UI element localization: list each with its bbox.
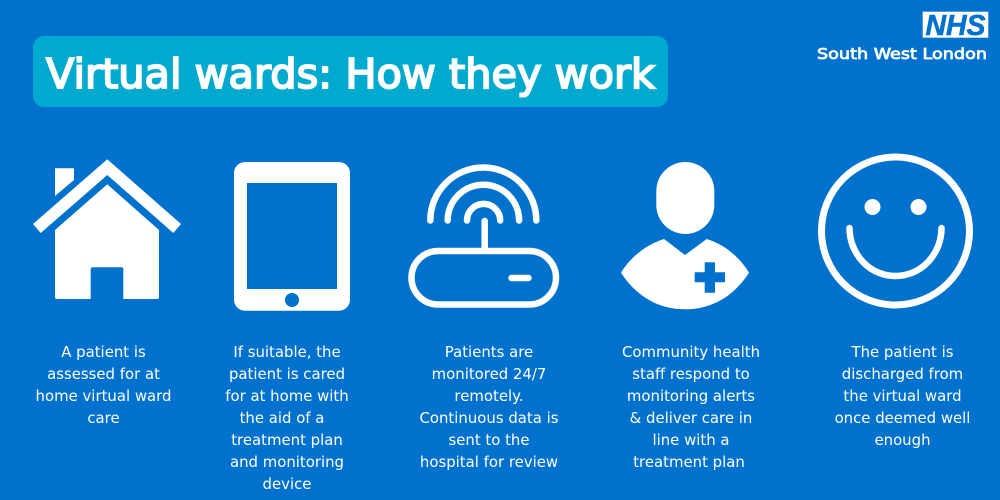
NHS South West London logo: South West London: [817, 45, 987, 63]
step 5 text: [835, 343, 970, 449]
step 2 text: and monitoring: [230, 453, 344, 471]
step 3 text: sent to the: [448, 431, 530, 449]
step 5 text: the virtual ward: [843, 387, 962, 405]
step 4 text: [622, 343, 760, 471]
step 3 text: [419, 343, 559, 471]
step 1 text: care: [87, 409, 120, 427]
step 5 text: enough: [874, 431, 931, 449]
step 5 text: once deemed well: [835, 409, 970, 427]
icon: house: [33, 159, 181, 299]
step 2 text: treatment plan: [231, 431, 343, 449]
step 1 text: A patient is: [61, 343, 146, 361]
step 3 text: Patients are: [445, 343, 533, 361]
step 5 text: discharged from: [842, 365, 963, 383]
step 1 text: [36, 343, 171, 427]
step 4 text: & deliver care in: [630, 409, 752, 427]
icon: smiley face: [822, 157, 970, 305]
step 5 text: The patient is: [850, 343, 954, 361]
step 3 text: hospital for review: [420, 453, 558, 471]
icon: tablet: [234, 162, 350, 311]
step 1 text: home virtual ward: [36, 387, 171, 405]
step 2 text: for at home with: [225, 387, 349, 405]
step 4 text: treatment plan: [633, 453, 745, 471]
title: Virtual wards: How they work: [46, 50, 655, 98]
step 4 text: Community health: [622, 343, 760, 361]
step 2 text: patient is cared: [229, 365, 345, 383]
step 3 text: monitored 24/7: [432, 365, 546, 383]
step 4 text: monitoring alerts: [627, 387, 755, 405]
NHS South West London logo: [817, 10, 988, 63]
NHS South West London logo: NHS: [926, 10, 986, 42]
step 2 text: the aid of a: [240, 409, 324, 427]
step 2 text: If suitable, the: [233, 343, 341, 361]
step 2 text: [225, 343, 349, 493]
step 3 text: Continuous data is: [419, 409, 559, 427]
icon: router with wifi signal: [412, 168, 556, 304]
step 1 text: assessed for at: [47, 365, 160, 383]
step 4 text: staff respond to: [632, 365, 750, 383]
title: [33, 36, 668, 107]
step 4 text: line with a: [652, 431, 730, 449]
icon: health worker: [621, 162, 749, 309]
step 2 text: device: [263, 475, 311, 493]
step 3 text: remotely.: [454, 387, 524, 405]
